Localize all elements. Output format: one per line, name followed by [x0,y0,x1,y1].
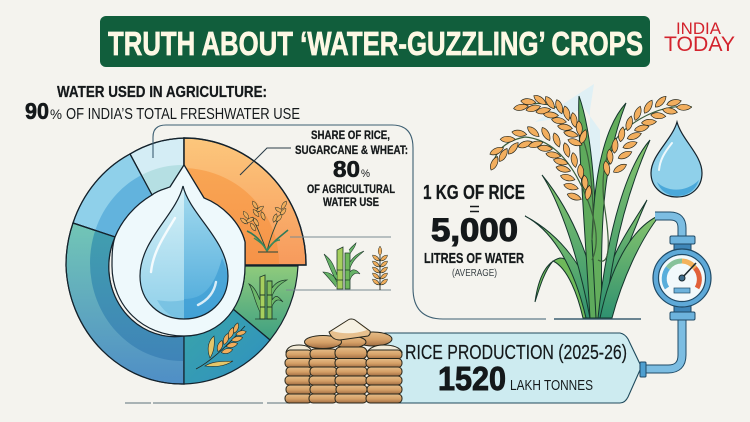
icon: sugarcane standalone [323,243,364,289]
callout: 1 kg of rice equals 5,000 litres: LITRES OF WATER [424,250,524,267]
sack column 3 [335,347,367,403]
panicle stems [492,104,692,261]
icon: sugarcane in green segment [249,275,287,319]
segment: teal large [65,222,185,385]
logo: India Today: TODAY [664,33,735,56]
callout: share of rice, sugarcane and wheat: 80 [333,156,360,182]
banner: rice production [385,333,640,403]
icon: central water drop [140,186,228,319]
segment: rice orange [183,137,307,266]
water pipe [640,216,682,377]
logo: India Today: INDIA [676,20,721,38]
title banner [100,16,650,67]
callout: share of rice, sugarcane and wheat: SHARE OF RICE, [311,128,390,142]
callout: 1 kg of rice equals 5,000 litres [423,182,525,279]
segment: sugarcane green [233,266,298,340]
centre white hole [112,165,245,336]
donut chart: water use share [66,138,306,384]
segment: blue [72,153,152,236]
callout: share of rice, sugarcane and wheat: WATER USE [323,195,379,209]
icon: water drop right [651,122,702,197]
callout: 1 kg of rice equals 5,000 litres: (AVERAGE) [452,267,497,279]
banner: rice production: RICE PRODUCTION (2025-26) [405,341,627,364]
segment: wheat teal [184,309,270,384]
sack column 1 [285,345,312,403]
leaves [525,96,660,318]
logo: India Today [664,20,735,56]
panicle: right [602,94,692,176]
callout: share of rice, sugarcane and wheat: SUGARCANE & WHEAT: [295,143,408,157]
water glow behind plant [535,84,601,270]
icon: wheat in teal segment [196,322,247,369]
heading: water used in agriculture: OF INDIA’S TOTAL FRESHWATER USE [66,106,300,123]
sack column 2 [309,349,337,403]
callout: 1 kg of rice equals 5,000 litres: 1 KG OF RICE [423,182,525,204]
icon: pressure gauge [653,236,711,320]
rice sacks pile [285,319,402,403]
sack column 4 [366,345,402,403]
icon: wheat standalone [371,246,389,290]
heading: water used in agriculture: 90 [25,98,49,124]
banner: rice production: LAKH TONNES [510,377,593,394]
callout: 1 kg of rice equals 5,000 litres: 5,000 [431,212,518,248]
connector lines [125,125,641,403]
banner: rice production: 1520 [438,360,506,397]
upper sacks [304,319,392,348]
rice plant illustration [488,84,692,318]
icon: rice plant in orange segment [239,200,288,252]
panicle: large left [488,125,593,202]
callout: share of rice, sugarcane and wheat [295,128,408,209]
panicle: upper left [513,93,589,148]
heading: water used in agriculture: WATER USED IN AGRICULTURE: [57,84,267,101]
segment: pale blue [129,137,185,194]
callout: share of rice, sugarcane and wheat: % [361,168,370,180]
callout: share of rice, sugarcane and wheat: OF AGRICULTURAL [307,182,395,196]
heading: water used in agriculture [25,84,300,124]
heading: water used in agriculture: % [50,106,62,122]
